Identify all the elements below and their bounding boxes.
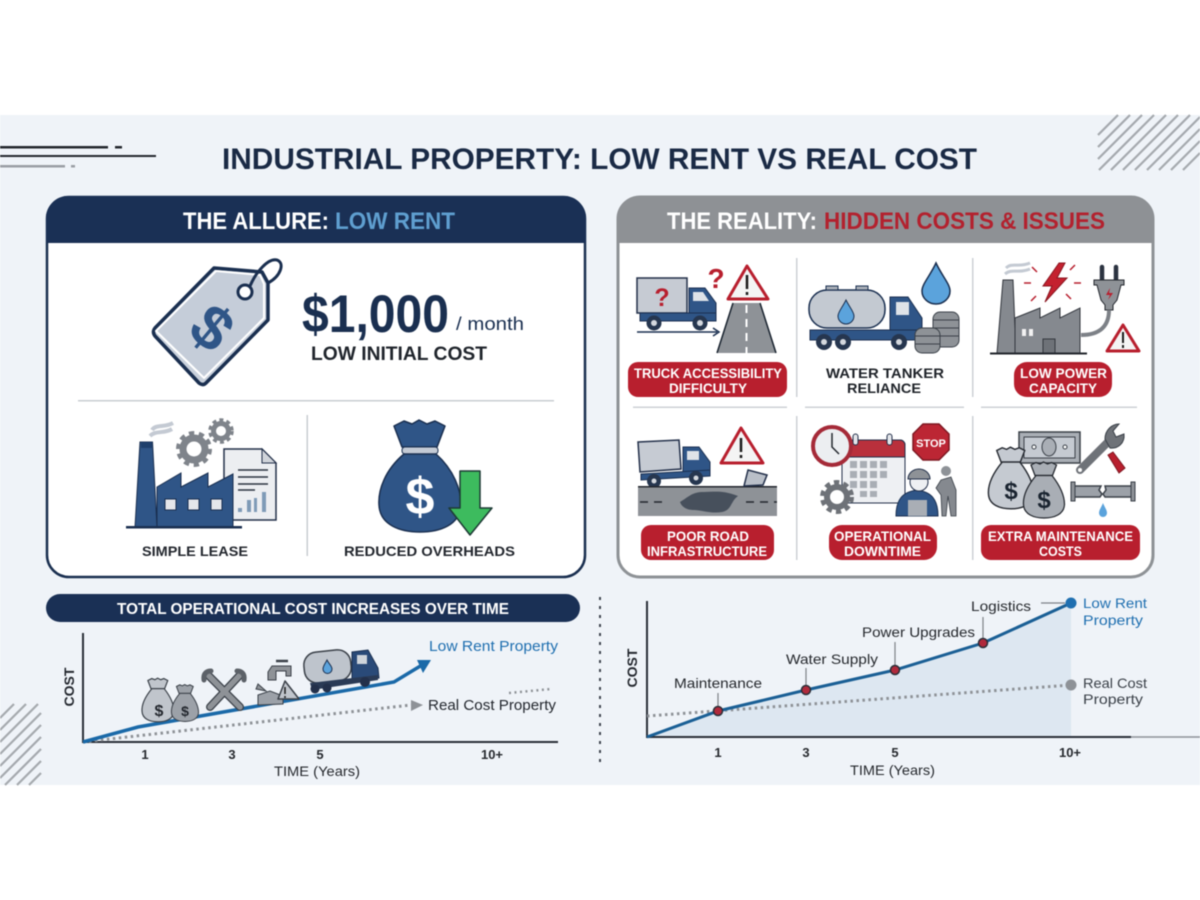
rent amount: $1,000 xyxy=(302,285,449,344)
end label: low rent property: Low Rent xyxy=(1083,595,1147,611)
callout: power upgrades: Power Upgrades xyxy=(862,624,975,640)
end label: real cost property: Property xyxy=(1083,691,1143,707)
dotted real cost line xyxy=(647,685,1071,716)
x axis ticks: 10+ xyxy=(481,747,503,762)
x axis ticks: 1 xyxy=(141,747,149,762)
axes xyxy=(647,601,1200,737)
end label: low rent property: Property xyxy=(1083,612,1143,628)
icon: leaking faucet and warning xyxy=(256,661,299,705)
leader lines xyxy=(718,603,1065,711)
end label: real cost property: Real Cost xyxy=(1083,675,1147,691)
end label: real cost property xyxy=(1083,675,1147,707)
icon: tanker with water drop and coins xyxy=(809,263,959,353)
icon: clock, calendar, stop sign and workers: STOP xyxy=(916,438,946,450)
label pill xyxy=(628,362,787,397)
plain label xyxy=(826,365,944,396)
x axis label: TIME (Years) xyxy=(274,763,360,779)
label pill: INFRASTRUCTURE xyxy=(647,543,767,559)
callout: water supply: Water Supply xyxy=(786,651,878,667)
panel: the allure xyxy=(46,196,586,577)
allure heading: THE ALLURE: xyxy=(183,208,329,235)
allure heading: LOW RENT xyxy=(335,208,455,235)
icon: water tanker xyxy=(303,649,379,694)
icon: clock, calendar, stop sign and workers xyxy=(813,424,956,516)
reality header bar xyxy=(617,196,1154,243)
dotted real cost line xyxy=(83,689,551,742)
decoration: bottom-left hatch xyxy=(0,704,41,785)
label pill: OPERATIONAL xyxy=(834,528,931,544)
icon: factory with plug and warning xyxy=(990,263,1139,354)
callout: logistics: Logistics xyxy=(971,598,1031,614)
label pill xyxy=(829,525,937,560)
simple lease label: SIMPLE LEASE xyxy=(142,543,248,559)
panel: the reality xyxy=(617,196,1154,577)
plain label: RELIANCE xyxy=(847,380,921,396)
icon: factory and lease xyxy=(126,420,276,528)
rent period: / month xyxy=(456,314,524,334)
data points xyxy=(714,638,988,716)
label pill xyxy=(641,525,774,560)
x axis ticks: 3 xyxy=(228,747,236,762)
x axis ticks: 5 xyxy=(891,745,899,760)
icon: price tag: $ xyxy=(176,291,247,366)
item: water tanker xyxy=(809,263,959,396)
background band xyxy=(0,115,1200,785)
item: operational downtime xyxy=(813,424,956,560)
label pill xyxy=(981,525,1140,560)
item: extra maintenance costs xyxy=(981,424,1140,560)
blue low rent line xyxy=(83,660,431,742)
icons: money bags: $ xyxy=(181,703,189,719)
label pill xyxy=(1014,362,1112,397)
icon: truck on narrow road: ? xyxy=(654,284,670,312)
icon: money bag with down arrow: $ xyxy=(406,468,435,526)
item: low power capacity xyxy=(990,263,1139,397)
reality heading: HIDDEN COSTS & ISSUES xyxy=(824,208,1105,235)
label pill: COSTS xyxy=(1039,543,1082,559)
shaded area xyxy=(647,603,1071,737)
x axis ticks xyxy=(141,747,503,762)
callout: maintenance: Maintenance xyxy=(674,675,762,691)
label pill: EXTRA MAINTENANCE xyxy=(988,528,1133,544)
line label: low rent property: Low Rent Property xyxy=(429,639,559,655)
label pill: TRUCK ACCESSIBILITY xyxy=(634,365,783,381)
line label: real cost property: Real Cost Property xyxy=(428,698,557,714)
icon: truck and pothole xyxy=(638,428,777,516)
label pill: CAPACITY xyxy=(1029,380,1098,396)
x axis ticks: 5 xyxy=(316,747,324,762)
label pill: DIFFICULTY xyxy=(669,380,748,396)
icons: money bags: $ xyxy=(155,703,164,720)
icon: money bag with down arrow xyxy=(379,420,492,535)
reality heading: THE REALITY: xyxy=(667,208,817,235)
end marker: low rent xyxy=(1066,598,1076,608)
icon: crossed wrenches xyxy=(204,671,244,707)
end label: low rent property xyxy=(1083,595,1147,628)
chart: left cost over time xyxy=(61,633,559,779)
icon: truck on narrow road xyxy=(637,263,776,353)
end marker: real cost xyxy=(1066,680,1076,690)
blue low rent line xyxy=(647,603,1071,737)
plain label: WATER TANKER xyxy=(826,365,944,381)
low initial cost label: LOW INITIAL COST xyxy=(311,344,487,365)
banner: total operational cost: TOTAL OPERATIONAL COST INCREASES OVER TIME xyxy=(117,601,509,618)
y axis label: COST xyxy=(61,667,77,706)
allure header bar xyxy=(46,196,586,243)
x axis ticks: 1 xyxy=(714,745,722,760)
x axis label: TIME (Years) xyxy=(850,762,935,778)
y axis label: COST xyxy=(624,648,640,687)
chart: right cost over time xyxy=(624,595,1200,778)
x axis ticks: 3 xyxy=(802,745,810,760)
x axis ticks xyxy=(714,745,1081,760)
reduced overheads label: REDUCED OVERHEADS xyxy=(344,543,515,559)
banner: total operational cost xyxy=(46,594,580,622)
decoration: top-left speed lines xyxy=(0,146,156,168)
label pill: POOR ROAD xyxy=(667,528,749,544)
item: poor road infrastructure xyxy=(638,428,777,560)
item: truck accessibility xyxy=(628,263,787,397)
icon: money, wrench and broken pipe: $ xyxy=(1004,478,1018,505)
icon: money, wrench and broken pipe: $ xyxy=(1037,487,1051,514)
title: INDUSTRIAL PROPERTY: LOW RENT VS REAL COST xyxy=(222,143,977,176)
icons: money bags xyxy=(142,678,199,722)
label pill: DOWNTIME xyxy=(844,543,921,559)
icon: truck on narrow road: ? xyxy=(707,263,725,294)
decoration: top-right hatch xyxy=(1098,115,1200,170)
icon: price tag xyxy=(154,260,281,384)
x axis ticks: 10+ xyxy=(1059,745,1081,760)
icon: money, wrench and broken pipe xyxy=(988,424,1135,518)
label pill: LOW POWER xyxy=(1020,365,1107,381)
axes xyxy=(83,633,558,742)
